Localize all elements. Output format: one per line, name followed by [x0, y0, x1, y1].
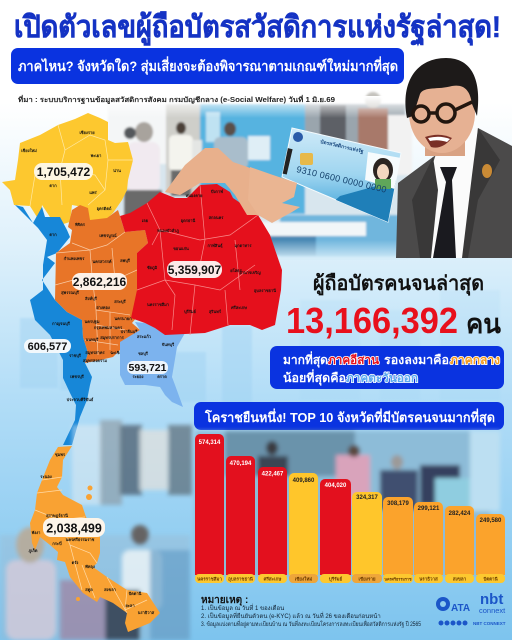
north province names: น่าน [113, 168, 121, 173]
nbt connext logo: connext [479, 606, 506, 615]
region value pills: 5,359,907 [168, 263, 222, 277]
bar: นครราชสีมา [195, 434, 224, 583]
bar: อุบลราชธานี [226, 456, 255, 583]
northeast province names: ชัยภูมิ [147, 265, 158, 271]
south province names: พังงา [31, 530, 40, 535]
bar: อุบลราชธานี: อุบลราชธานี [228, 576, 254, 582]
hair [405, 58, 478, 118]
region value pills: 2,862,216 [73, 275, 127, 289]
bar: สงขลา: สงขลา [453, 576, 467, 582]
central province names: พิจิตร [74, 222, 86, 227]
top 10 heading [194, 402, 504, 430]
bar: นครศรีธรรมราช: นครศรีธรรมราช [384, 576, 412, 582]
central region map [55, 205, 148, 364]
summary callout: ภาคตะวันออก [346, 371, 418, 385]
total number: 13,166,392 [286, 300, 458, 341]
bar: เชียงใหม่: เชียงใหม่ [295, 576, 312, 582]
mouth [425, 135, 452, 148]
south province names [28, 452, 155, 615]
north region map [2, 113, 133, 228]
north province names: แพร่ [89, 190, 98, 195]
east province names: ชลบุรี [138, 351, 149, 357]
bar: เชียงใหม่ [289, 473, 318, 583]
bottom left crowd photo [0, 420, 192, 640]
south province names: พัทลุง [84, 564, 95, 570]
hand [165, 148, 262, 215]
region value pills: 1,705,472 [37, 165, 91, 179]
subtitle banner [11, 48, 404, 84]
south region map [28, 446, 160, 632]
old lady [135, 122, 153, 142]
right crowd [305, 104, 405, 164]
south province names: สตูล [85, 587, 93, 593]
bar: นราธิวาส: 299,121 [418, 506, 440, 512]
north province names: อุตรดิตถ์ [97, 206, 112, 212]
bar: บุรีรัมย์: บุรีรัมย์ [329, 576, 343, 582]
summary callout: มากที่สุด [283, 351, 328, 368]
notes: หมายเหตุ : [201, 595, 248, 606]
man white shirt [176, 122, 186, 134]
summary callout: ภาคกลาง [450, 353, 500, 367]
northeast province names: กาฬสินธุ์ [207, 243, 223, 249]
summary callout: รองลงมาคือ [384, 353, 449, 367]
central province names: กำแพงเพชร [64, 256, 85, 261]
pin [482, 164, 492, 178]
notes: 2. เป็นข้อมูลที่ยืนยันตัวตน (e-KYC) แล้ว ณ วันที่ 26 ของเดือนก่อนหน้า [201, 611, 381, 620]
notes: 1. เป็นข้อมูล ณ วันที่ 1 ของเดือน [201, 603, 284, 612]
west province names [49, 232, 94, 402]
bar: สงขลา [445, 506, 474, 583]
south province names: ชุมพร [55, 452, 66, 458]
central province names: สระบุรี [114, 299, 127, 305]
west province names: ตาก [49, 232, 57, 237]
north province names [21, 130, 121, 212]
south value pill: 2,038,499 [46, 522, 102, 536]
summary callout: ภาคอีสาน [328, 353, 380, 367]
central province names: สิงห์บุรี [85, 296, 98, 302]
region value pills: 606,577 [28, 341, 67, 353]
south province names: กระบี่ [52, 540, 62, 546]
west province names: เพชรบุรี [70, 374, 85, 380]
south province names: สุราษฎร์ธานี [46, 513, 68, 519]
central province names: สุพรรณบุรี [61, 290, 80, 296]
bar: อุบลราชธานี: 470,194 [230, 461, 252, 467]
east province names: ตราด [157, 374, 167, 379]
south province names: ตรัง [72, 560, 78, 565]
northeast province names: อุดรธานี [181, 218, 196, 224]
welfare card: บัตรสวัสดิการแห่งรัฐ [320, 138, 364, 155]
northeast province names: มุกดาหาร [235, 243, 252, 249]
data logo [436, 597, 470, 614]
data logo: ATA [451, 603, 470, 614]
notes [201, 595, 422, 628]
northeast province names: สกลนคร [209, 215, 224, 220]
north province names: ตาก [49, 183, 57, 188]
bar: นครราชสีมา: นครราชสีมา [197, 576, 222, 582]
north province names: เชียงราย [79, 130, 95, 135]
central province names: ฉะเชิงเทรา [110, 350, 130, 355]
central province names: สมุทรสงคราม [83, 358, 107, 364]
northeast province names: ศรีสะเกษ [231, 305, 247, 310]
nbt connext logo [479, 591, 506, 615]
northeast province names: บึงกาฬ [211, 189, 223, 194]
northeast province names: นครราชสีมา [147, 302, 169, 307]
top 10 bar chart [195, 434, 505, 583]
northeast province names: หนองบัวลำภู [157, 228, 179, 234]
bar: ปัตตานี: 249,580 [480, 518, 502, 524]
south province names: นราธิวาส [138, 610, 155, 615]
bar: ศรีสะเกษ: 422,467 [262, 472, 284, 478]
northeast province names: สุรินทร์ [209, 309, 222, 315]
south province names: ภูเก็ต [28, 547, 38, 554]
bar: นครศรีธรรมราช: 308,179 [387, 501, 410, 507]
west region map [15, 205, 94, 445]
northeast region map [120, 184, 282, 335]
nbt connext logo: nbt [480, 591, 503, 608]
bar: นครราชสีมา: 574,314 [199, 440, 221, 446]
tie [433, 167, 457, 258]
northeast province names: ขอนแก่น [173, 246, 189, 251]
northeast province names: ยโสธร [230, 268, 243, 273]
bar: เชียงราย: 324,317 [356, 495, 378, 501]
total number: คน [466, 309, 502, 339]
glasses [413, 102, 472, 122]
bar: เชียงใหม่: 409,860 [293, 478, 315, 484]
source line: ที่มา : ระบบบริการฐานข้อมูลสวัสดิการสังคม กรมบัญชีกลาง (e-Social Welfare) วันที่ 1 มิ.ย.69 [18, 94, 335, 105]
subtitle banner: ภาคไหน? จังหวัดใด? สุ่มเสี่ยงจะต้องพิจารณาตามเกณฑ์ใหม่มากที่สุด [18, 56, 398, 75]
northeast province names: บุรีรัมย์ [184, 309, 197, 315]
bar: นราธิวาส [414, 502, 443, 583]
west province names: กาญจนบุรี [52, 321, 71, 327]
top crowd photo [108, 92, 412, 260]
central province names: ลพบุรี [120, 258, 131, 264]
summary callout: น้อยที่สุดคือ [283, 369, 346, 386]
background cityscape [20, 290, 500, 406]
bar: ศรีสะเกษ: ศรีสะเกษ [264, 576, 281, 582]
fingers over card [248, 167, 300, 223]
bar chart photo background [195, 431, 500, 576]
north province names: พะเยา [90, 153, 101, 158]
neck and face [425, 130, 465, 156]
west province names: ประจวบคีรีขันธ์ [67, 396, 94, 402]
bar: นครศรีธรรมราช [383, 497, 413, 583]
welfare card: 9310 0600 0000 0000 [296, 164, 387, 195]
central province names: สมุทรปราการ [100, 334, 125, 341]
south province names: ปัตตานี [129, 590, 142, 596]
central province names: ปราจีนบุรี [121, 328, 138, 335]
central province names: นครปฐม [85, 318, 100, 325]
bar: ปัตตานี [476, 514, 505, 583]
welfare card [280, 128, 401, 226]
notes: 3. ข้อมูลแบ่งตามที่อยู่ตามทะเบียนบ้าน ณ วันที่ลงทะเบียนโครงการลงทะเบียนเพื่อสวัสดิการแห่งรัฐ ปี 2565 [201, 620, 422, 628]
central province names: นนทบุรี [86, 337, 99, 343]
west province names: ราชบุรี [69, 353, 82, 359]
shirt [430, 128, 478, 258]
bar: บุรีรัมย์: 404,020 [325, 483, 347, 489]
central province names: สมุทรสาคร [85, 350, 106, 356]
central province names: นครสวรรค์ [92, 259, 112, 264]
south province names: นครศรีธรรมราช [66, 537, 95, 542]
northeast province names [142, 189, 276, 315]
bar: นราธิวาส: นราธิวาส [419, 576, 438, 582]
central province names [61, 222, 138, 364]
east province names [132, 333, 175, 379]
south province names: ยะลา [125, 603, 135, 608]
northeast province names: อุบลราชธานี [254, 288, 276, 294]
northeast province names: เลย [142, 218, 149, 223]
north province names: เชียงใหม่ [21, 148, 37, 153]
northeast province names: หนองคาย [186, 193, 203, 198]
bar: บุรีรัมย์ [320, 479, 351, 583]
bar: เชียงราย [352, 492, 382, 583]
south province names: ระนอง [40, 474, 52, 479]
central province names: นครนายก [114, 316, 132, 321]
bar: สงขลา: 282,424 [449, 511, 471, 517]
bar: ศรีสะเกษ [258, 467, 287, 583]
east province names: ระยอง [132, 374, 144, 379]
man at kiosk [224, 122, 236, 136]
suit [396, 128, 512, 258]
east province names: จันทบุรี [162, 342, 175, 348]
region value pills [24, 163, 222, 374]
lapel [462, 128, 500, 258]
social icons [438, 620, 506, 626]
region value pills: 593,721 [129, 362, 167, 374]
total heading: ผู้ถือบัตรคนจนล่าสุด [313, 272, 484, 297]
northeast province names: อำนาจเจริญ [239, 270, 261, 276]
below card [280, 215, 410, 257]
bar: ปัตตานี: ปัตตานี [483, 576, 499, 582]
central province names: เพชรบูรณ์ [99, 233, 117, 239]
central province names: กรุงเทพมหานคร [94, 325, 123, 331]
east region map [120, 322, 185, 407]
south province names: สงขลา [104, 587, 116, 592]
bar: เชียงราย: เชียงราย [358, 576, 376, 582]
east province names: สระแก้ว [137, 333, 152, 339]
person [396, 58, 512, 258]
central province names: อ่างทอง [96, 305, 110, 310]
south value pill [43, 518, 105, 537]
social icons: NBT CONNEXT [473, 621, 506, 626]
summary callout [270, 346, 504, 389]
top 10 heading: โคราชยืนหนึ่ง! TOP 10 จังหวัดที่มีบัตรคนจนมากที่สุด [204, 408, 495, 426]
